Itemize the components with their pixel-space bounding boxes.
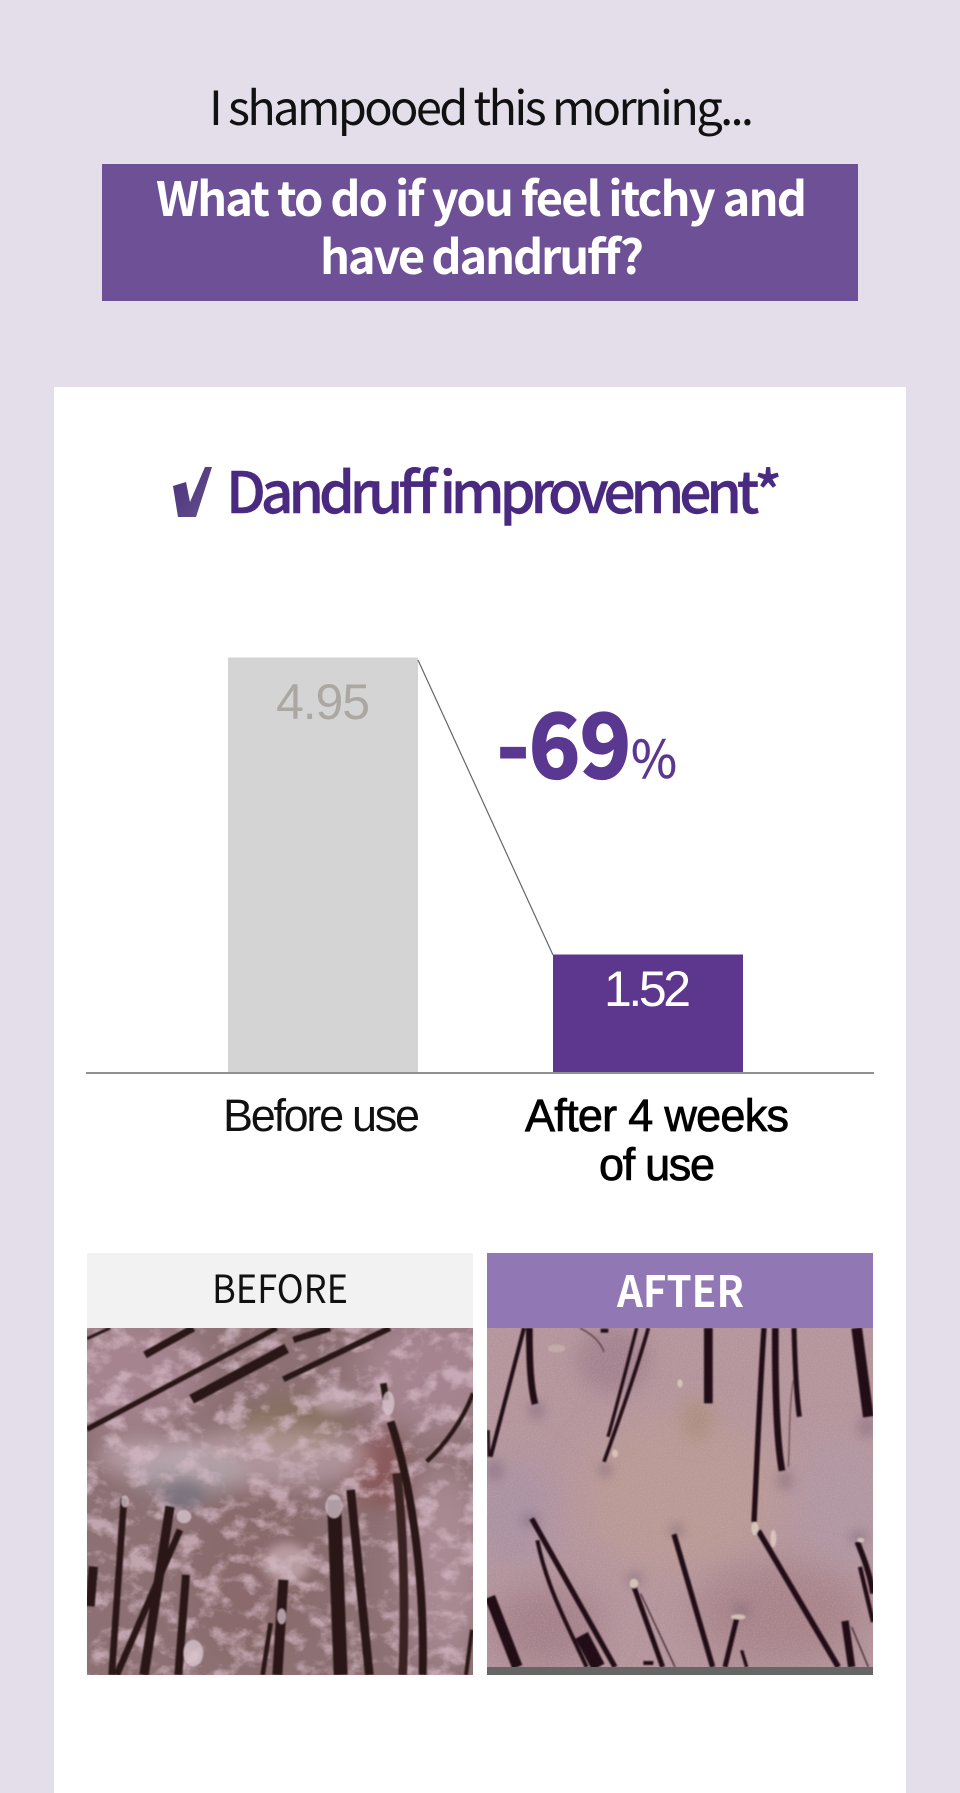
reduction figure: -69: [497, 675, 631, 804]
photo bottom strip: [487, 1667, 873, 1675]
icon: check mark: [173, 467, 212, 517]
panel: dandruff improvement: [54, 387, 906, 1793]
bar: after 4 weeks: [553, 954, 743, 1072]
label: after 4 weeks of use: [525, 1090, 789, 1190]
before photo: flaky scalp: [87, 1328, 473, 1675]
baseline axis: [86, 1072, 874, 1074]
value: after: 1.52: [604, 961, 691, 1017]
before label: BEFORE: [212, 1259, 348, 1315]
label: before use: Before use: [223, 1090, 420, 1141]
heading: Dandruff improvement*: [226, 448, 782, 530]
bar: before use: [228, 658, 418, 1072]
connector line: [418, 660, 553, 955]
title line 2: have dandruff?: [320, 219, 644, 288]
bar chart: [86, 658, 874, 1190]
before panel: [57, 1253, 503, 1675]
label: after 4 weeks of use: After 4 weeks: [525, 1090, 789, 1141]
value: before: 4.95: [276, 674, 370, 730]
eyebrow text: I shampooed this morning...: [209, 70, 754, 139]
title line 1: What to do if you feel itchy and: [156, 161, 807, 230]
label: after 4 weeks of use: of use: [599, 1139, 715, 1190]
reduction figure: %: [631, 718, 677, 793]
title banner: [102, 161, 858, 301]
after panel: [473, 1253, 880, 1675]
after photo: clean scalp: [487, 1328, 873, 1667]
after label: AFTER: [616, 1258, 744, 1320]
